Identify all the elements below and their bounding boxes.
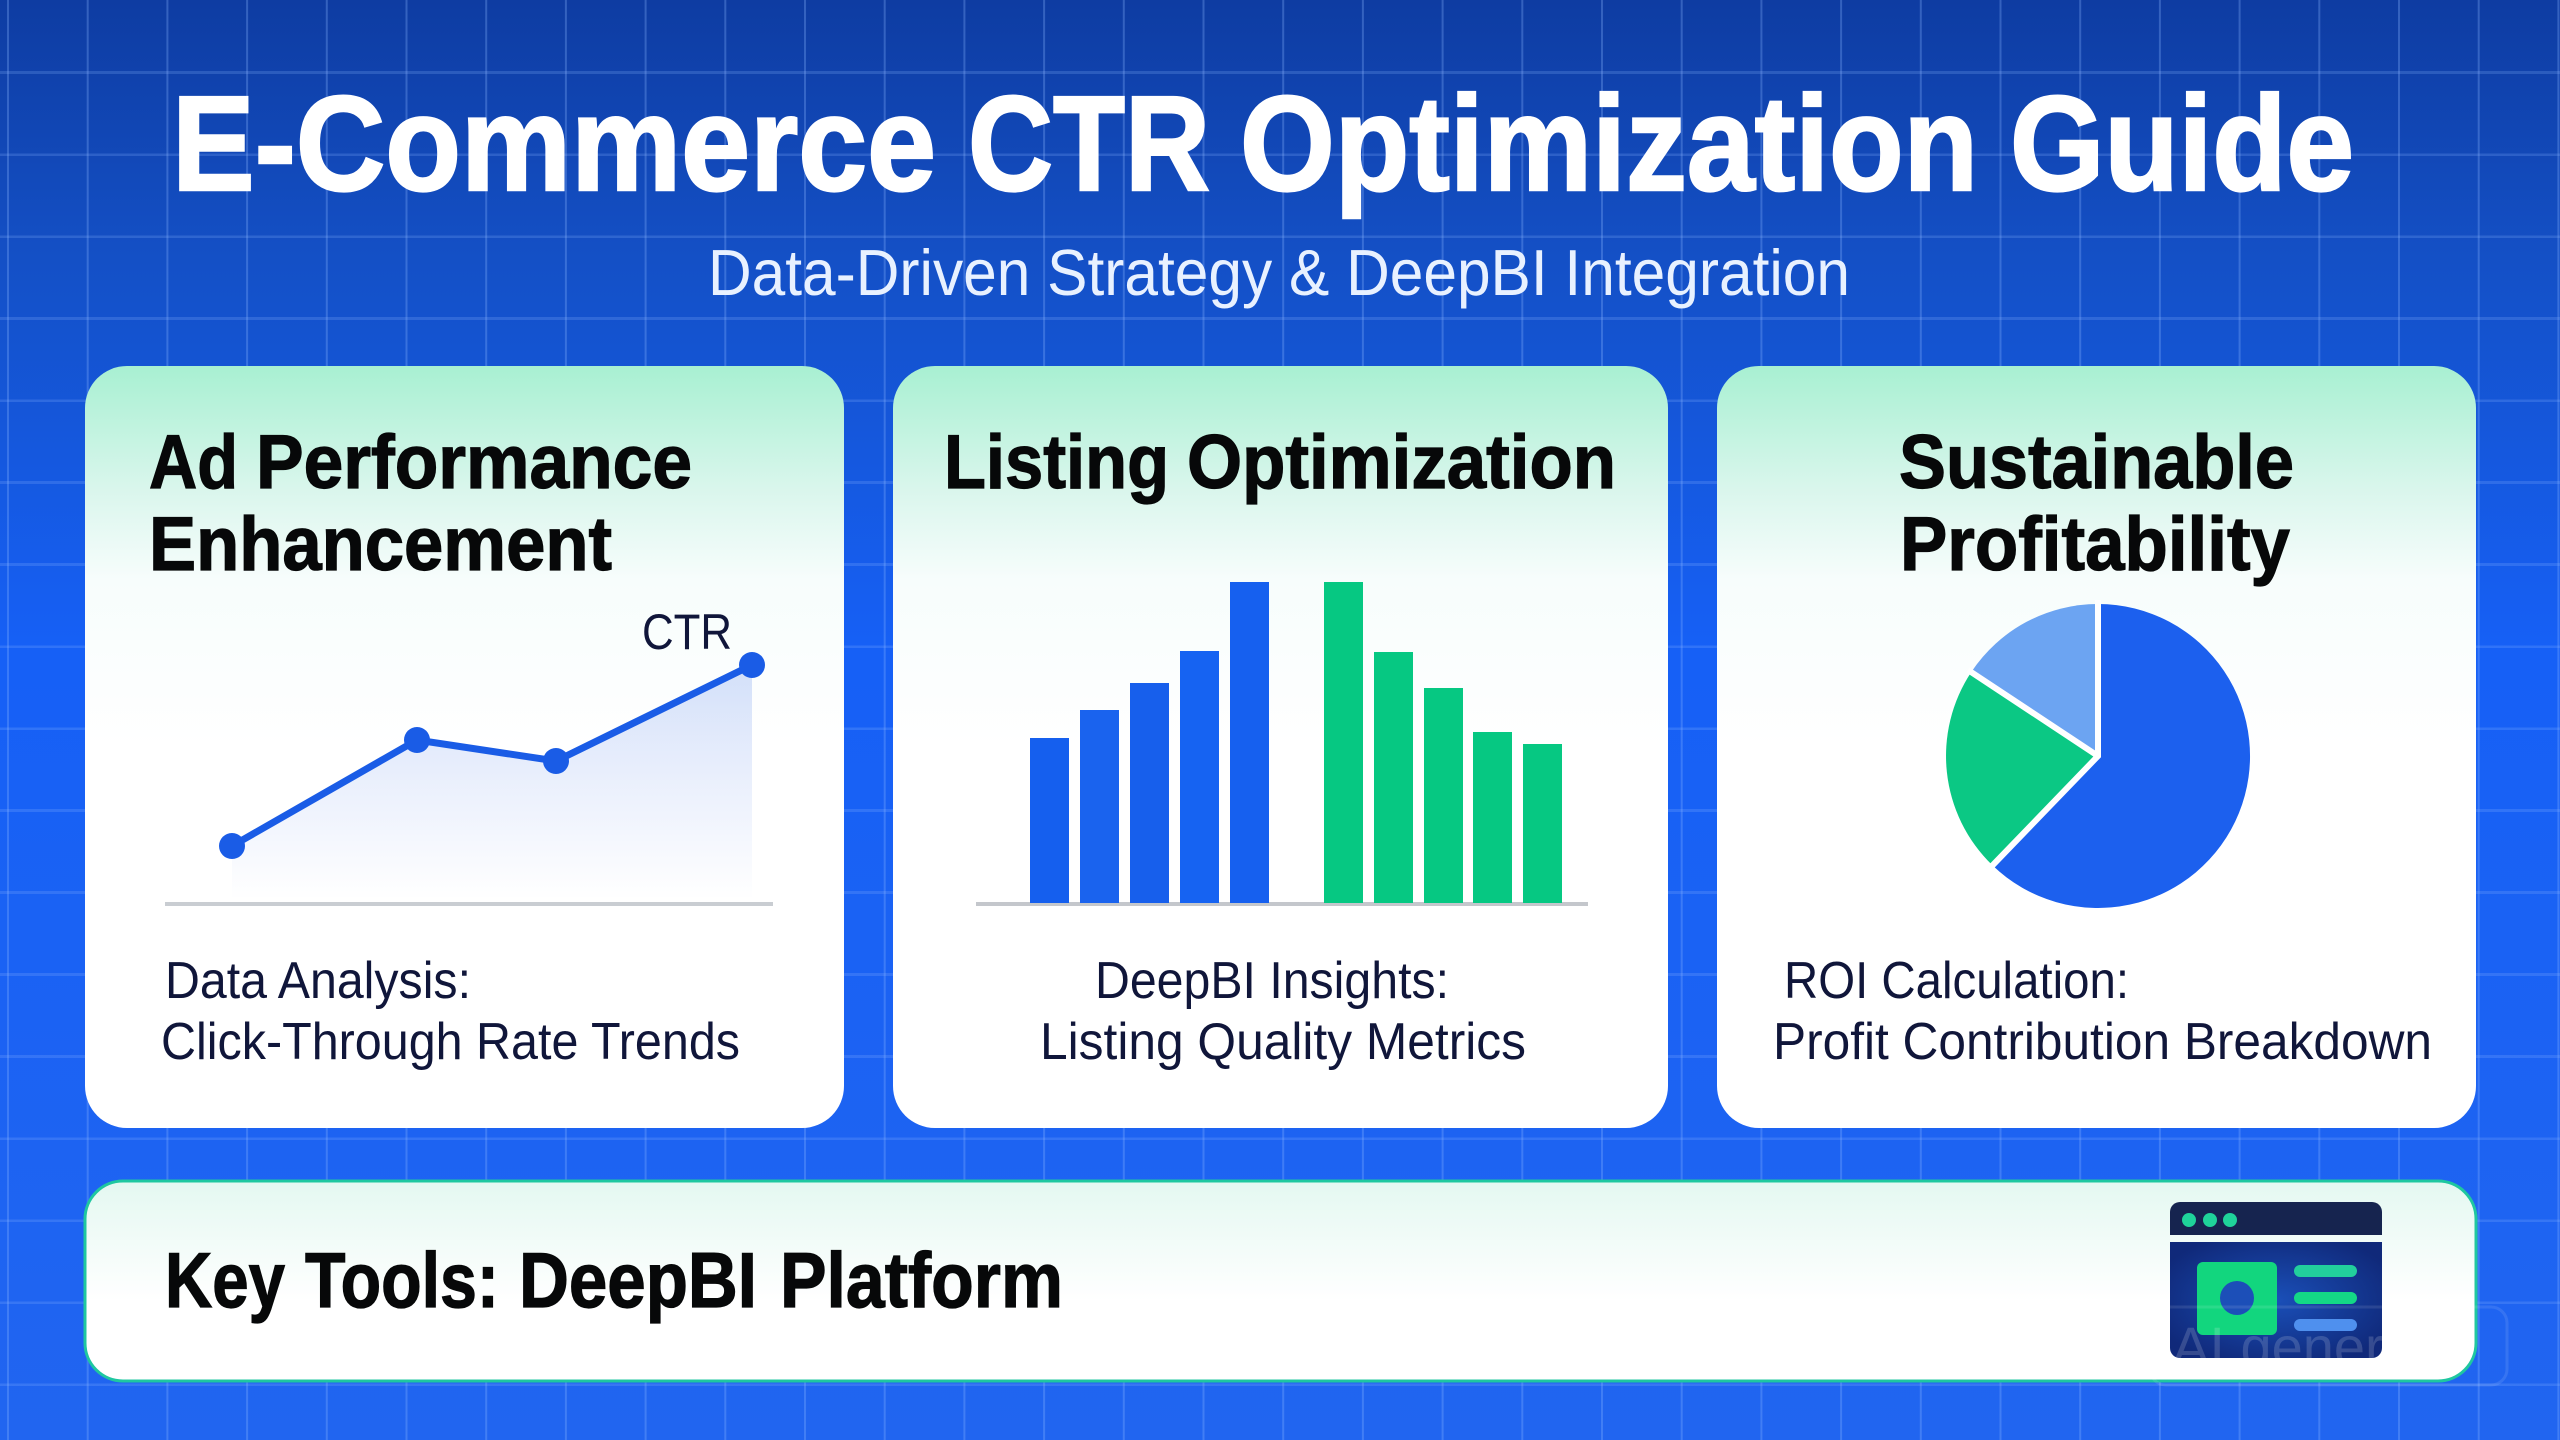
bar chart: listing quality <box>976 582 1588 904</box>
heading: key tools <box>165 1236 1063 1324</box>
title: Optimization <box>1240 68 1978 219</box>
heading: ad performance enhancement: Ad <box>149 420 238 505</box>
caption: data analysis: Data Analysis: <box>165 952 471 1010</box>
heading: key tools: Key <box>165 1236 285 1324</box>
panel: key tools bar <box>85 1181 2476 1381</box>
panel: sustainable profitability <box>1717 366 2476 1128</box>
heading: sustainable profitability: Sustainable <box>1899 420 2294 505</box>
title <box>172 68 2354 219</box>
caption: deepbi insights: Listing Quality Metrics <box>1040 1013 1526 1071</box>
subtitle: Data-Driven Strategy & DeepBI Integration <box>708 236 1850 309</box>
title: E-Commerce <box>172 68 936 219</box>
caption: data analysis: Click-Through Rate Trends <box>161 1013 740 1071</box>
heading: ad performance enhancement: Performance <box>256 420 692 505</box>
heading: ad performance enhancement: Enhancement <box>149 502 612 587</box>
pie chart: profit contribution <box>1946 600 2250 908</box>
heading: listing optimization: Listing <box>944 420 1169 505</box>
panel: ad performance enhancement <box>85 366 844 1128</box>
icon: DeepBI dashboard window <box>2170 1202 2382 1358</box>
line chart: CTR trend <box>165 604 773 904</box>
heading: key tools: DeepBI <box>519 1236 757 1324</box>
heading: listing optimization: Optimization <box>1187 420 1616 505</box>
caption: deepbi insights <box>1040 952 1526 1071</box>
caption: data analysis <box>161 952 740 1071</box>
heading: ad performance enhancement <box>149 420 692 587</box>
heading: key tools: Platform <box>780 1236 1063 1324</box>
title: Guide <box>2010 68 2354 219</box>
caption: ROI calculation <box>1773 952 2432 1071</box>
heading: listing optimization <box>944 420 1616 505</box>
title: CTR <box>968 68 1210 219</box>
heading: key tools: Tools: <box>305 1236 499 1324</box>
heading: sustainable profitability <box>1899 420 2294 587</box>
caption: deepbi insights: DeepBI Insights: <box>1095 952 1449 1010</box>
line chart: CTR trend: CTR <box>642 604 732 660</box>
panel: listing optimization <box>893 366 1668 1128</box>
watermark: AI generated <box>2172 1315 2493 1378</box>
heading: sustainable profitability: Profitability <box>1900 502 2290 587</box>
caption: ROI calculation: ROI Calculation: <box>1784 952 2129 1010</box>
caption: ROI calculation: Profit Contribution Breakdown <box>1773 1013 2432 1071</box>
